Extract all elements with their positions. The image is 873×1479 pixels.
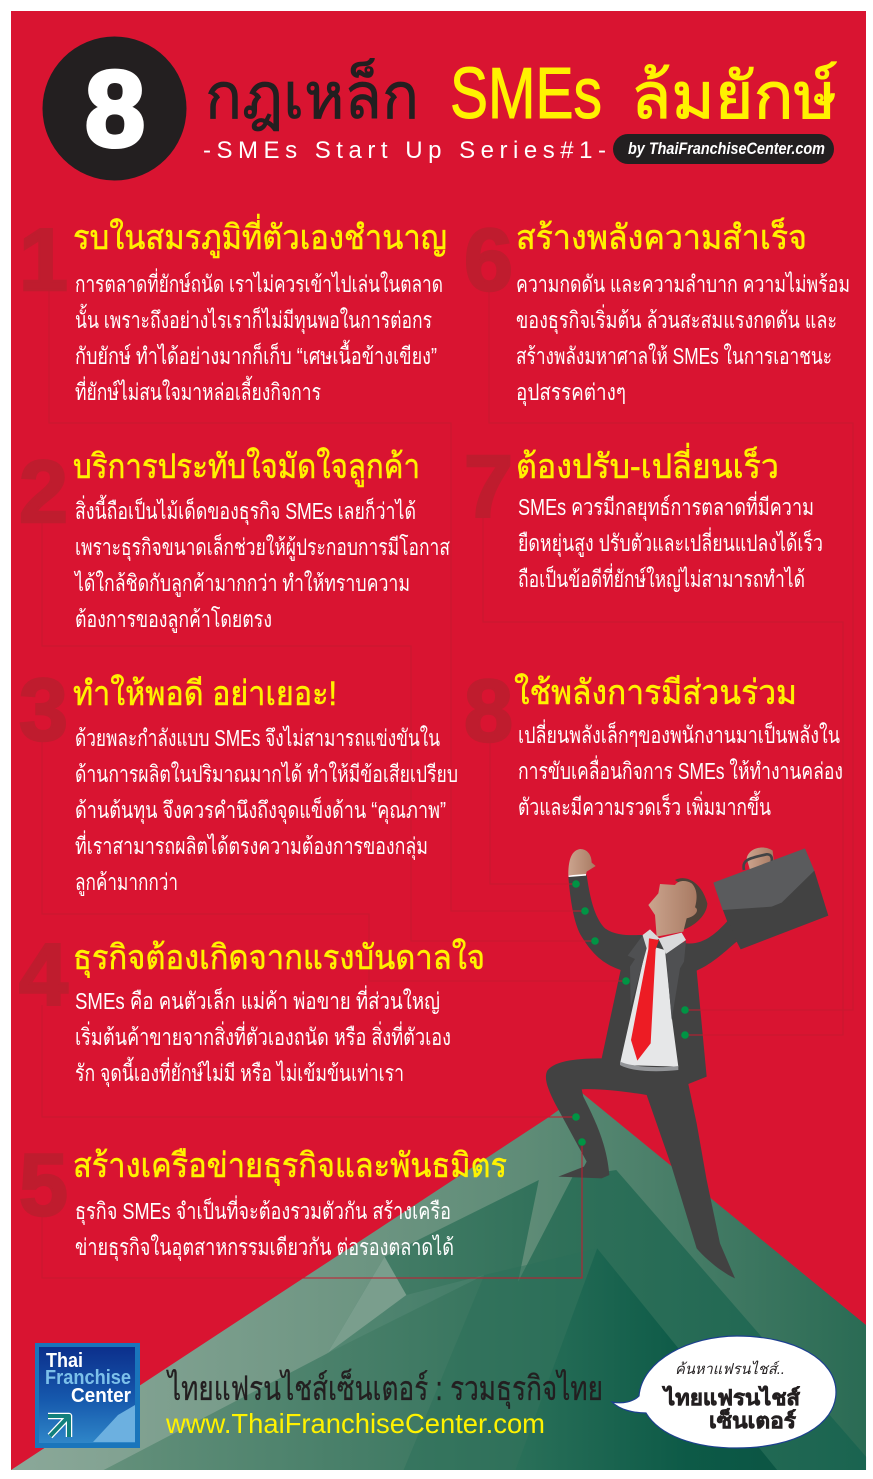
panel: rule 2: สิ่งนี้ถือเป็นไม้เด็ดของธุรกิจ SMEs เลยก็ว่าได้: [75, 495, 416, 525]
logo: Thai Franchise Center: [35, 1343, 140, 1448]
panel: rule 2: เพราะธุรกิจขนาดเล็กช่วยให้ผู้ประกอบการมีโอกาส: [75, 532, 450, 561]
speech bubble: ค้นหาแฟรนไชส์..: [675, 1360, 785, 1378]
panel: rule 5: สร้างเครือข่ายธุรกิจและพันธมิตร: [73, 1147, 507, 1186]
logo: Thai Franchise Center: Franchise: [45, 1367, 131, 1389]
panel: rule 2: ต้องการของลูกค้าโดยตรง: [75, 606, 272, 633]
speech bubble: [612, 1336, 836, 1448]
shirt cuff: [568, 874, 586, 877]
panel: rule 7: [464, 437, 823, 592]
panel: rule 6: สร้างพลังความสำเร็จ: [516, 217, 807, 257]
panel: rule 1: การตลาดที่ยักษ์ถนัด เราไม่ควรเข้าไปเล่นในตลาด: [75, 268, 443, 297]
panel: rule 1: กับยักษ์ ทำได้อย่างมากก็เก็บ “เศษเนื้อข้างเขียง”: [75, 340, 437, 369]
panel: rule 8: 8: [464, 661, 513, 760]
panel: rule 4: SMEs คือ คนตัวเล็ก แม่ค้า พ่อขาย ที่ส่วนใหญ่: [75, 985, 440, 1014]
byline pill: [613, 134, 834, 164]
icon: left fist: [568, 849, 596, 875]
icon: arrow: [48, 1416, 69, 1437]
panel: rule 3: ด้านการผลิตในปริมาณมากได้ ทำให้มีข้อเสียเปรียบ: [75, 761, 458, 787]
title: SMEs: SMEs: [450, 54, 602, 134]
panel: rule 3: ด้านต้นทุน จึงควรคำนึงถึงจุดแข็งด้าน “คุณภาพ”: [75, 795, 446, 824]
logo: Thai Franchise Center: Thai: [46, 1350, 83, 1372]
panel: rule 5: ข่ายธุรกิจในอุตสาหกรรมเดียวกัน ต่อรองตลาดได้: [75, 1234, 454, 1261]
footer url: www.ThaiFranchiseCenter.com: [165, 1408, 545, 1439]
panel: rule 4: 4: [19, 925, 68, 1024]
panel: rule 3: [19, 660, 458, 896]
panel: rule 7: 7: [464, 437, 513, 536]
collar: [643, 929, 686, 954]
connector lines: [42, 290, 853, 1278]
panel: rule 4: ธุรกิจต้องเกิดจากแรงบันดาลใจ: [73, 938, 485, 978]
panel: rule 2: 2: [19, 442, 68, 541]
footer tagline: ไทยแฟรนไชส์เซ็นเตอร์ : รวมธุรกิจไทย: [166, 1368, 603, 1409]
panel: rule 1: 1: [19, 210, 68, 309]
speech bubble: ไทยแฟรนไชส์: [662, 1385, 800, 1410]
shirt: [620, 945, 678, 1067]
panel: rule 6: 6: [464, 210, 513, 309]
speech bubble: เซ็นเตอร์: [709, 1407, 797, 1433]
panel: rule 4: เริ่มต้นค้าขายจากสิ่งที่ตัวเองถนัด หรือ สิ่งที่ตัวเอง: [75, 1021, 451, 1050]
header: [42, 36, 837, 180]
panel: rule 3: ด้วยพละกำลังแบบ SMEs จึงไม่สามารถแข่งขันใน: [75, 725, 440, 751]
panel: rule 5: ธุรกิจ SMEs จำเป็นที่จะต้องรวมตัวกัน สร้างเครือ: [75, 1195, 451, 1225]
icon: right fist: [747, 847, 774, 870]
panel: rule 1: ที่ยักษ์ไม่สนใจมาหล่อเลี้ยงกิจการ: [75, 376, 321, 405]
businessman figure: [546, 847, 828, 1278]
badge: number 8: 8: [85, 48, 145, 169]
panel: rule 5: [19, 1135, 507, 1261]
badge: number 8: [42, 36, 186, 180]
subtitle: -SMEs Start Up Series#1-: [203, 137, 606, 164]
green dots on figure: [572, 880, 689, 1146]
mountain: [11, 1093, 866, 1470]
panel: rule 8: [464, 661, 843, 820]
byline pill: by ThaiFranchiseCenter.com: [628, 139, 825, 158]
panel: rule 2: บริการประทับใจมัดใจลูกค้า: [73, 447, 420, 487]
panel: rule 4: รัก จุดนี้เองที่ยักษ์ไม่มี หรือ ไม่เข้มข้นเท่าเรา: [75, 1057, 404, 1087]
necktie: [631, 938, 659, 1061]
panel: rule 1: [19, 210, 447, 405]
shirt hem: [620, 1062, 678, 1071]
panel: rule 4: [19, 925, 485, 1087]
panel: rule 2: [19, 442, 450, 633]
panel: rule 3: ที่เราสามารถผลิตได้ตรงความต้องการของกลุ่ม: [75, 830, 428, 860]
panel: rule 3: ลูกค้ามากกว่า: [75, 869, 178, 896]
panel: rule 6: อุปสรรคต่างๆ: [516, 379, 626, 406]
title: ล้มยักษ์: ล้มยักษ์: [631, 60, 837, 132]
suit: [546, 875, 737, 1278]
panel: rule 6: [464, 210, 850, 406]
icon: briefcase: [713, 848, 828, 949]
panel: rule 2: ได้ใกล้ชิดกับลูกค้ามากกว่า ทำให้ทราบความ: [73, 570, 410, 597]
lapels: [628, 935, 686, 1020]
panel: rule 3: 3: [19, 660, 68, 759]
panel: rule 1: รบในสมรภูมิที่ตัวเองชำนาญ: [73, 214, 447, 258]
panel: rule 3: ทำให้พอดี อย่าเยอะ!: [73, 674, 337, 713]
panel: rule 7: ต้องปรับ-เปลี่ยนเร็ว: [516, 443, 779, 486]
hair and head: [648, 878, 707, 937]
panel: rule 1: นั้น เพราะถึงอย่างไรเราก็ไม่มีทุนพอในการต่อกร: [75, 304, 432, 334]
panel: rule 5: 5: [19, 1135, 68, 1234]
panel: rule 8: ตัวและมีความรวดเร็ว เพิ่มมากขึ้น: [518, 791, 771, 820]
title: dark part: กฎเหล็ก: [205, 59, 419, 132]
panel: rule 8: ใช้พลังการมีส่วนร่วม: [514, 673, 797, 712]
logo: Thai Franchise Center: Center: [71, 1385, 131, 1407]
